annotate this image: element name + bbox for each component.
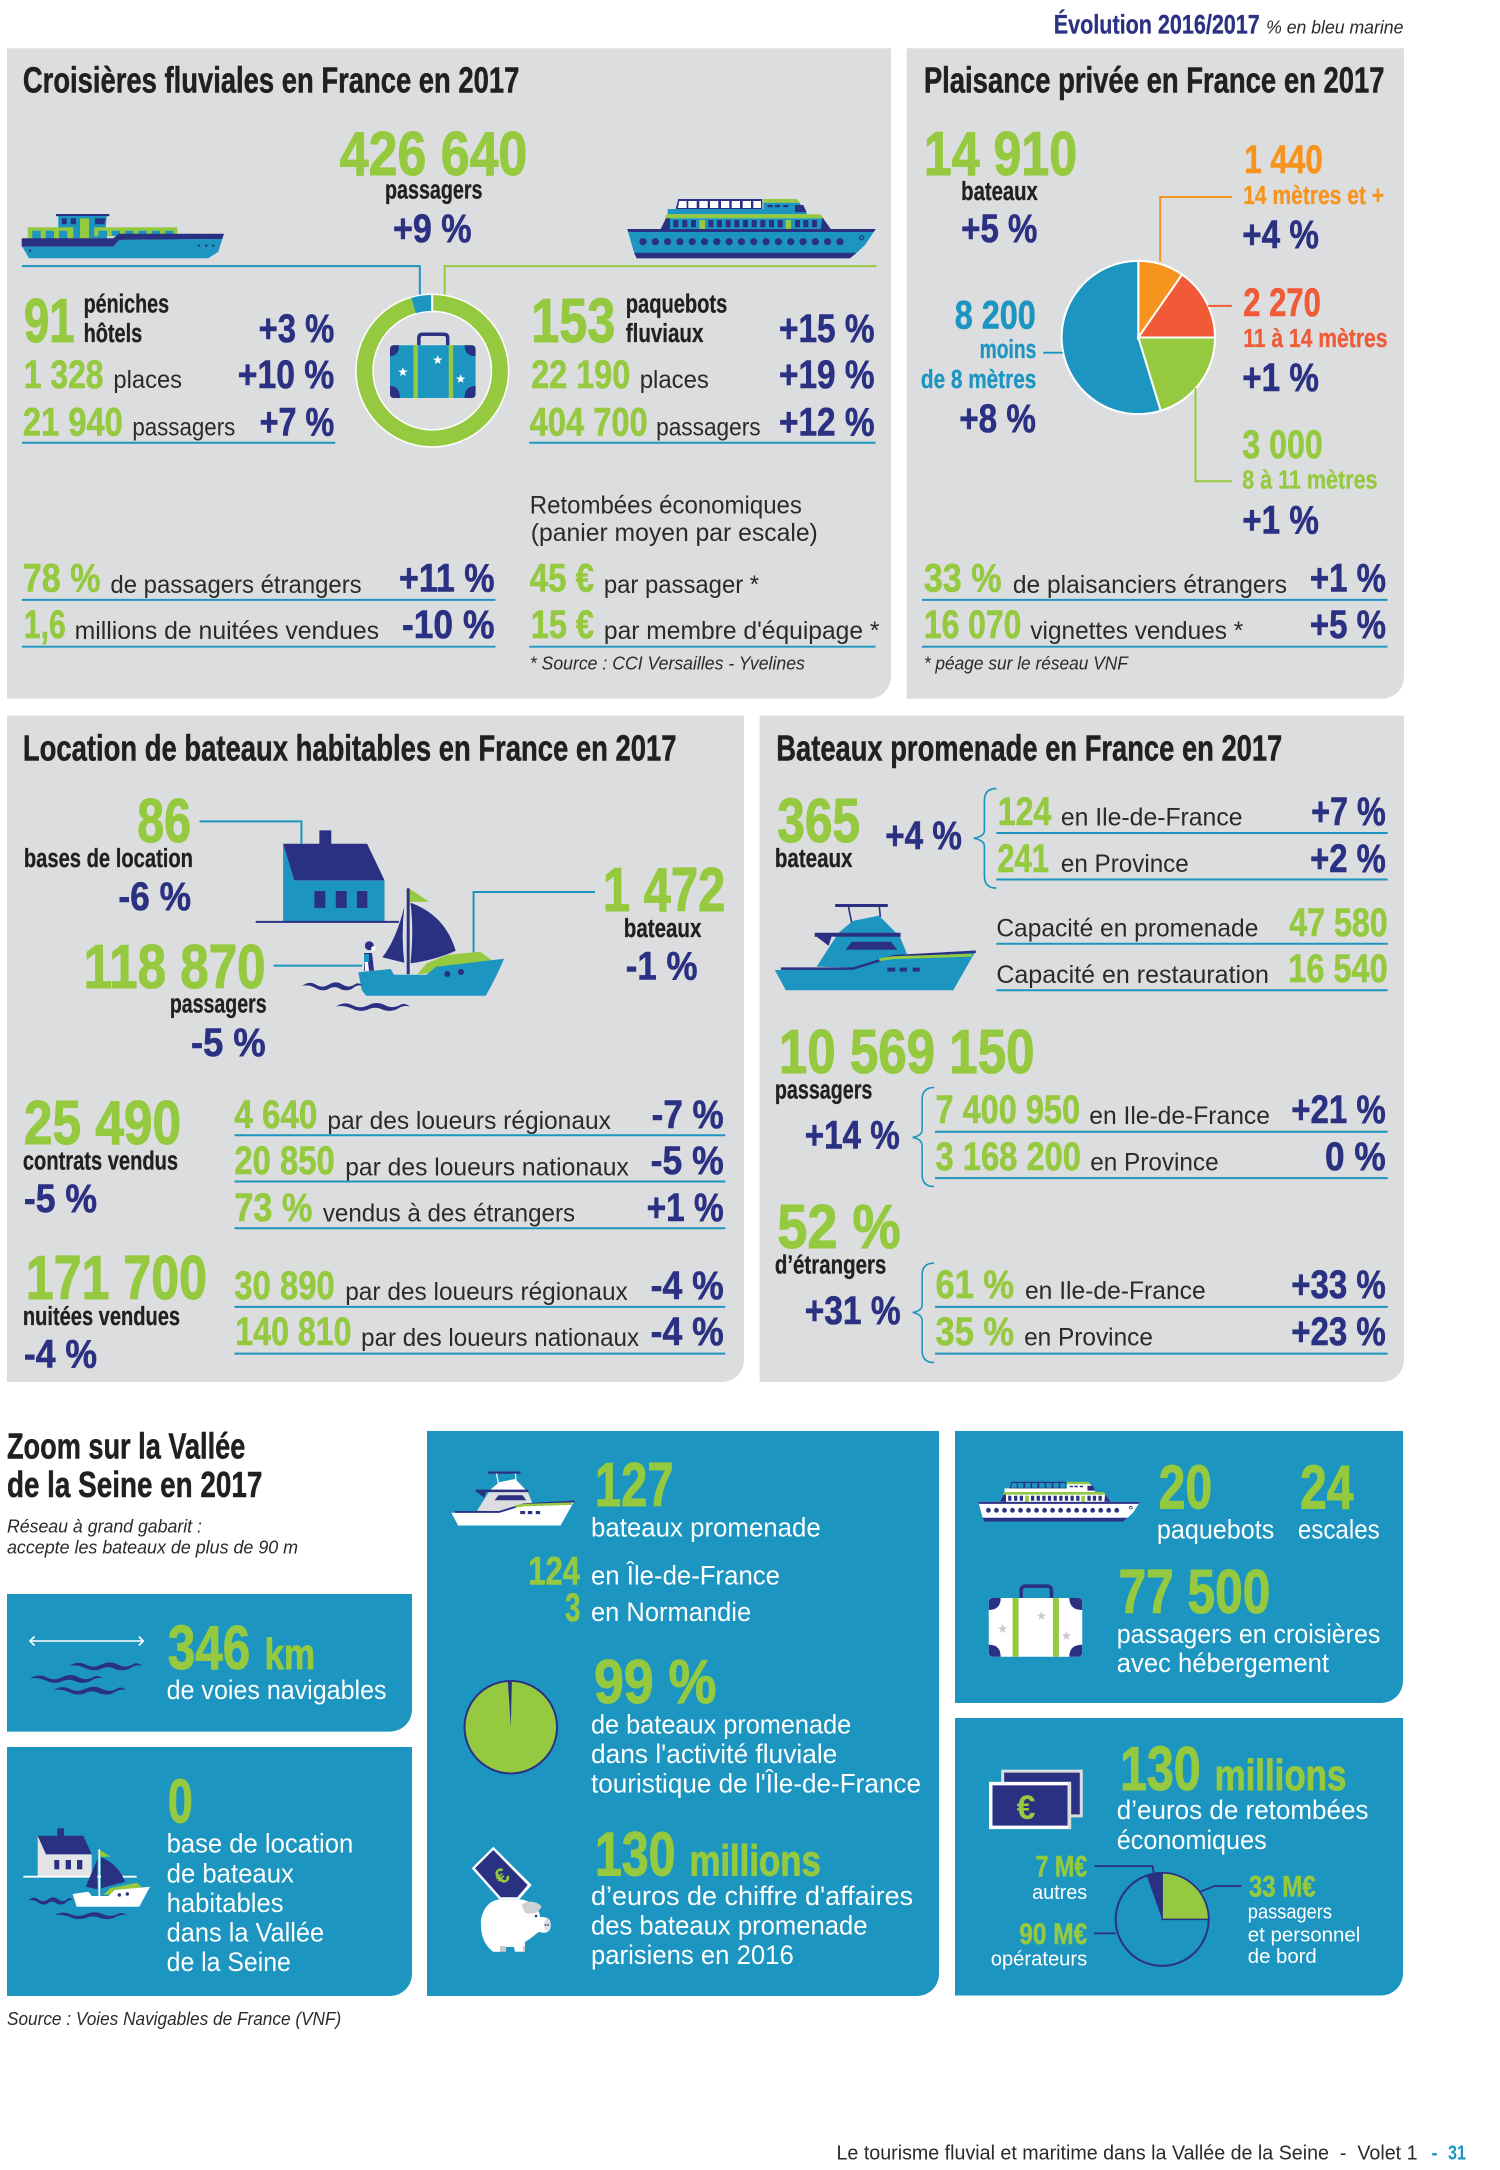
key figure: passagers: passagers xyxy=(775,1077,872,1105)
label: 14 mètres et plus: 14 mètres et + xyxy=(1243,182,1384,210)
footer: 31 xyxy=(1448,2142,1466,2164)
stats: paquebots fluviaux xyxy=(529,287,876,444)
key figure: passagers: 426 640 xyxy=(340,120,527,189)
key figure: bases de location: bases de location xyxy=(24,845,193,873)
stats: nuitées détail: 140 810 xyxy=(235,1310,352,1354)
stats: péniches hôtels xyxy=(22,287,335,444)
label: 14 mètres et plus xyxy=(1242,138,1384,257)
stats: capacités xyxy=(996,901,1388,991)
note: réseau à grand gabarit: Réseau à grand gabarit : xyxy=(7,1516,202,1537)
figure: 0 base de location: de la Seine xyxy=(167,1947,291,1977)
label: 8 à 11 mètres: 3 000 xyxy=(1242,423,1323,467)
label: 33 M€ passagers et personnel de bord: de bord xyxy=(1248,1946,1317,1968)
stats: péniches hôtels: 91 xyxy=(24,287,75,356)
stats: capacités: 47 580 xyxy=(1289,901,1388,945)
stats: étrangers par région: en Ile-de-France xyxy=(1025,1277,1206,1305)
stats: retombées économiques: Retombées économiques xyxy=(530,491,802,519)
stats: péniches hôtels: +3 % xyxy=(259,307,334,351)
label: 14 mètres et plus: +4 % xyxy=(1242,213,1319,257)
connector: bases to house xyxy=(199,821,301,844)
label: 14 mètres et plus: 1 440 xyxy=(1244,138,1323,182)
icon: paquebot xyxy=(627,199,876,258)
stats: étrangers par région: 61 % xyxy=(936,1263,1014,1307)
stats: étrangers par région: 35 % xyxy=(936,1310,1014,1354)
panel background xyxy=(7,48,891,699)
panel: croisières fluviales xyxy=(7,48,891,699)
stats: passagers par région: en Ile-de-France xyxy=(1089,1102,1270,1130)
figure: 20 paquebots xyxy=(1157,1453,1274,1544)
icon: euro banknotes: € xyxy=(1017,1789,1036,1827)
stats: péniches hôtels: places xyxy=(113,366,182,394)
stats: bateaux par région: +2 % xyxy=(1310,837,1386,881)
key figure: passagers: passagers xyxy=(170,990,267,1018)
stats: nuitées détail: par des loueurs régionaux xyxy=(345,1278,628,1306)
stats: plaisanciers et vignettes xyxy=(922,556,1388,675)
panel background xyxy=(7,1594,412,1732)
key figure: passagers xyxy=(84,933,267,1065)
chart: pie by boat length xyxy=(1061,260,1216,415)
stats: retombées économiques xyxy=(529,491,880,675)
label: 11 à 14 mètres: +1 % xyxy=(1242,356,1319,400)
figure: 99 %: touristique de l'Île-de-France xyxy=(591,1767,921,1798)
chart: donut with suitcase xyxy=(355,293,509,448)
key figure: 365 bateaux: bateaux xyxy=(775,845,853,873)
figure: 77 500 passagers: passagers en croisières xyxy=(1117,1619,1380,1649)
key figure: passagers: 118 870 xyxy=(84,933,266,1002)
footer: - xyxy=(1432,2142,1438,2164)
stats: nuitées détail: -4 % xyxy=(651,1310,724,1354)
figure: 0 base de location: habitables xyxy=(167,1888,284,1918)
stats: contrats vendus: 25 490 xyxy=(24,1089,181,1158)
key figure: passagers xyxy=(340,120,527,251)
label: 8 à 11 mètres: 8 à 11 mètres xyxy=(1242,466,1378,494)
icon: euro banknotes xyxy=(991,1771,1081,1829)
key figure: bateaux: bateaux xyxy=(961,178,1038,206)
brace: étrangers xyxy=(913,1263,934,1363)
panel: base de location xyxy=(7,1747,412,1996)
figure: 130 millions: économiques xyxy=(1117,1825,1267,1855)
stats: paquebots fluviaux: +15 % xyxy=(779,307,875,351)
icon: waves xyxy=(30,1662,143,1695)
panel: location de bateaux habitables xyxy=(7,716,744,1382)
stats: retombées économiques: 45 € xyxy=(530,556,594,600)
connector: blue slice xyxy=(1043,352,1063,354)
stats: paquebots fluviaux: passagers xyxy=(656,413,761,441)
stats: contrats détail: 4 640 xyxy=(234,1093,317,1137)
heading: location de bateaux: Location de bateaux habitables en France en 2017 xyxy=(23,728,677,768)
panel background xyxy=(955,1718,1403,1996)
label: 11 à 14 mètres xyxy=(1242,281,1388,400)
figure: 127 bateaux promenade: 124 xyxy=(528,1550,580,1594)
figure: 24 escales: 24 xyxy=(1300,1453,1353,1522)
stats: péniches hôtels: péniches xyxy=(84,290,169,318)
label: 8 à 11 mètres: +1 % xyxy=(1242,498,1319,542)
figure: 77 500 passagers: avec hébergement xyxy=(1117,1648,1330,1678)
key figure: bateaux: +5 % xyxy=(961,207,1037,251)
icon: suitcase xyxy=(390,334,476,398)
stats: étrangers par région: +23 % xyxy=(1291,1310,1386,1354)
stats: plaisanciers et vignettes: de plaisanciers étrangers xyxy=(1013,571,1287,599)
stats: contrats détail: -5 % xyxy=(651,1139,724,1183)
stats: étrangers et nuitées: millions de nuitées vendues xyxy=(75,617,379,645)
icon: sailboat with passenger xyxy=(302,888,504,1011)
connector: orange slice xyxy=(1160,197,1232,262)
stats: contrats vendus: contrats vendus xyxy=(23,1148,178,1176)
figure: 346 km: de voies navigables xyxy=(167,1675,387,1705)
stats: passagers par région: 3 168 200 xyxy=(936,1135,1081,1179)
key figure: bateaux: 14 910 xyxy=(924,120,1077,189)
stats: capacités: Capacité en promenade xyxy=(996,915,1258,943)
stats: péniches hôtels: +10 % xyxy=(238,353,334,397)
heading: croisières fluviales: Croisières fluviales en France en 2017 xyxy=(23,61,519,101)
stats: plaisanciers et vignettes: vignettes vendues * xyxy=(1030,617,1244,645)
heading: zoom sur la Vallée de la Seine: de la Seine en 2017 xyxy=(7,1465,262,1505)
stats: paquebots fluviaux: +12 % xyxy=(779,400,875,444)
figure: 20 paquebots: 20 xyxy=(1159,1453,1212,1522)
stats: nuitées vendues: 171 700 xyxy=(26,1244,207,1313)
label: 8 à 11 mètres xyxy=(1242,423,1378,542)
stats: contrats détail: 73 % xyxy=(234,1186,312,1230)
stats: contrats vendus xyxy=(23,1089,181,1221)
stats: paquebots fluviaux: paquebots xyxy=(626,290,727,318)
stats: contrats détail: par des loueurs nationaux xyxy=(345,1154,629,1182)
icon: white promenade boat xyxy=(451,1473,574,1525)
stats: contrats vendus: -5 % xyxy=(24,1177,97,1221)
stats: plaisanciers et vignettes: +1 % xyxy=(1310,556,1386,600)
key figure: étrangers: 52 % xyxy=(777,1193,901,1262)
stats: bateaux par région: 241 xyxy=(997,837,1049,881)
stats: péniches hôtels: 21 940 xyxy=(23,400,123,444)
stats: contrats détail: par des loueurs régionaux xyxy=(327,1107,611,1135)
key figure: bateaux: -1 % xyxy=(626,945,697,989)
brace: passagers xyxy=(913,1088,934,1187)
key figure: bases de location: 86 xyxy=(137,787,191,856)
figure: 24 escales: escales xyxy=(1298,1514,1380,1544)
stats: péniches hôtels: passagers xyxy=(132,413,235,441)
icon: white paquebot xyxy=(978,1482,1140,1521)
key figure: passagers xyxy=(775,1018,1035,1158)
figure: 130 millions: d’euros de chiffre d'affaires xyxy=(591,1881,913,1911)
panel: bateaux promenade xyxy=(760,716,1404,1382)
icon: white suitcase xyxy=(989,1586,1082,1657)
label: 90 M€ opérateurs xyxy=(991,1918,1088,1971)
connector: péniches to donut xyxy=(22,266,420,294)
label: 33 M€ passagers et personnel de bord xyxy=(1248,1871,1360,1968)
label: 33 M€ passagers et personnel de bord: 33 M€ xyxy=(1249,1871,1316,1904)
figure: 0 base de location: de bateaux xyxy=(167,1858,294,1888)
figure: 127 bateaux promenade: en Île-de-France xyxy=(591,1560,780,1591)
stats: retombées économiques: 15 € xyxy=(531,603,594,647)
panel: retombées économiques xyxy=(955,1718,1403,1996)
stats: retombées économiques: * Source : CCI Versailles - Yvelines xyxy=(530,654,805,675)
label: moins de 8 mètres: 8 200 xyxy=(955,293,1036,337)
label: moins de 8 mètres: de 8 mètres xyxy=(921,366,1036,394)
stats: étrangers par région: en Province xyxy=(1024,1324,1153,1352)
label: 7 M€ autres: 7 M€ xyxy=(1036,1851,1088,1884)
heading: zoom sur la Vallée de la Seine xyxy=(7,1427,262,1505)
figure: 346 km: 346 xyxy=(168,1614,250,1683)
key figure: bateaux: bateaux xyxy=(624,915,702,943)
connector: paquebots to donut xyxy=(445,266,877,294)
panel background xyxy=(760,716,1404,1382)
label: 7 M€ autres: autres xyxy=(1032,1882,1087,1904)
connector: 90 M€ xyxy=(1094,1932,1116,1934)
label: 33 M€ passagers et personnel de bord: et personnel xyxy=(1248,1924,1360,1946)
footer: Le tourisme fluvial et maritime dans la Vallée de la Seine - Volet 1 xyxy=(836,2142,1418,2164)
panel background xyxy=(955,1431,1403,1703)
key figure: 365 bateaux xyxy=(775,787,962,873)
figure: 99 % xyxy=(591,1648,921,1798)
figure: 127 bateaux promenade: en Normandie xyxy=(591,1597,751,1627)
panel background xyxy=(906,48,1404,699)
stats: nuitées vendues: -4 % xyxy=(24,1333,97,1377)
icon: piggy bank with banknote xyxy=(472,1847,551,1952)
key figure: bateaux xyxy=(924,120,1077,251)
stats: péniches hôtels: hôtels xyxy=(84,320,142,348)
figure: 346 km: km xyxy=(265,1630,315,1679)
panel: bateaux promenade Vallée de la Seine xyxy=(427,1431,939,1996)
figure: 99 %: 99 % xyxy=(594,1648,716,1717)
stats: paquebots fluviaux: 153 xyxy=(531,287,615,356)
stats: paquebots fluviaux: 404 700 xyxy=(530,400,648,444)
label: moins de 8 mètres: moins xyxy=(980,336,1036,364)
key figure: passagers: 10 569 150 xyxy=(779,1018,1035,1087)
stats: contrats détail: -7 % xyxy=(652,1093,724,1137)
stats: étrangers par région: +33 % xyxy=(1291,1263,1386,1307)
figure: 127 bateaux promenade: bateaux promenade xyxy=(591,1512,821,1542)
figure: 99 %: de bateaux promenade xyxy=(591,1709,851,1739)
icon: house and boat xyxy=(23,1828,150,1919)
stats: étrangers par région xyxy=(935,1263,1388,1354)
figure: 77 500 passagers xyxy=(1117,1558,1380,1678)
stats: passagers par région xyxy=(935,1088,1388,1179)
figure: 0 base de location: dans la Vallée xyxy=(167,1917,324,1947)
panel background xyxy=(7,716,744,1382)
key figure: étrangers: d’étrangers xyxy=(775,1252,886,1280)
connector: passagers to person xyxy=(274,965,362,967)
icon: péniche xyxy=(22,214,224,258)
stats: étrangers et nuitées: 78 % xyxy=(23,556,100,600)
label: moins de 8 mètres xyxy=(921,293,1036,441)
stats: passagers par région: 0 % xyxy=(1325,1135,1386,1179)
stats: capacités: 16 540 xyxy=(1288,947,1388,991)
stats: passagers par région: 7 400 950 xyxy=(936,1088,1080,1132)
stats: retombées économiques: par membre d'équipage * xyxy=(604,617,880,645)
key figure: 365 bateaux: +4 % xyxy=(885,814,962,858)
stats: passagers par région: en Province xyxy=(1090,1149,1219,1177)
figure: 130 millions: 130 xyxy=(595,1820,676,1889)
stats: plaisanciers et vignettes: * péage sur le réseau VNF xyxy=(924,654,1129,675)
connector: 7 M€ xyxy=(1094,1866,1154,1874)
source: Source : Voies Navigables de France (VNF) xyxy=(7,2009,341,2030)
panel background xyxy=(427,1431,939,1996)
panel: paquebots Vallée de la Seine xyxy=(955,1431,1403,1703)
figure: 99 %: dans l'activité fluviale xyxy=(591,1739,837,1769)
icon: width arrow xyxy=(30,1636,143,1646)
stats: bateaux par région: en Ile-de-France xyxy=(1061,803,1242,831)
stats: étrangers et nuitées xyxy=(22,556,495,647)
key figure: 365 bateaux: 365 xyxy=(777,787,860,856)
key figure: bateaux: 1 472 xyxy=(603,856,725,925)
stats: contrats détail xyxy=(234,1093,725,1230)
icon: house xyxy=(256,830,399,922)
key figure: passagers: +14 % xyxy=(805,1114,900,1158)
heading: bateaux promenade: Bateaux promenade en France en 2017 xyxy=(776,728,1282,768)
figure: 130 millions: d’euros de retombées xyxy=(1117,1795,1368,1825)
panel background xyxy=(7,1747,412,1996)
figure: 130 millions: 130 xyxy=(1120,1735,1201,1804)
stats: retombées économiques: (panier moyen par escale) xyxy=(531,519,818,547)
stats: étrangers et nuitées: de passagers étrangers xyxy=(110,571,362,599)
stats: bateaux par région: 124 xyxy=(998,790,1051,834)
figure: 130 millions: parisiens en 2016 xyxy=(591,1940,794,1970)
stats: nuitées détail xyxy=(234,1264,725,1354)
key figure: étrangers: +31 % xyxy=(805,1289,901,1333)
figure: 127 bateaux promenade: 127 xyxy=(595,1451,674,1520)
stats: plaisanciers et vignettes: +5 % xyxy=(1310,603,1386,647)
stats: contrats détail: vendus à des étrangers xyxy=(323,1199,575,1227)
stats: plaisanciers et vignettes: 33 % xyxy=(924,556,1001,600)
key figure: étrangers xyxy=(775,1193,901,1333)
icon: piggy bank with banknote: € xyxy=(489,1862,514,1890)
label: 11 à 14 mètres: 11 à 14 mètres xyxy=(1243,325,1388,353)
heading: zoom sur la Vallée de la Seine: Zoom sur la Vallée xyxy=(7,1427,245,1467)
figure: 130 millions xyxy=(1117,1735,1368,1855)
legend: évolution 2016/2017: % en bleu marine xyxy=(1266,17,1403,38)
chart: retombées pie xyxy=(1116,1873,1209,1966)
connector: red slice xyxy=(1208,305,1232,307)
key figure: passagers: passagers xyxy=(385,177,483,205)
stats: paquebots fluviaux: +19 % xyxy=(779,353,875,397)
figure: 346 km xyxy=(167,1614,387,1705)
stats: bateaux par région xyxy=(996,790,1388,881)
legend: évolution 2016/2017: Évolution 2016/2017 xyxy=(1054,8,1260,39)
stats: plaisanciers et vignettes: 16 070 xyxy=(924,603,1021,647)
figure: 130 millions: millions xyxy=(689,1836,821,1885)
figure: 0 base de location: base de location xyxy=(167,1829,353,1859)
stats: péniches hôtels: 1 328 xyxy=(24,353,103,397)
figure: 130 millions: millions xyxy=(1215,1751,1346,1800)
figure: 20 paquebots: paquebots xyxy=(1157,1514,1274,1544)
figure: 0 base de location xyxy=(167,1767,353,1977)
stats: bateaux par région: +7 % xyxy=(1311,790,1386,834)
label: 11 à 14 mètres: 2 270 xyxy=(1243,281,1321,325)
label: 90 M€ opérateurs: 90 M€ xyxy=(1019,1918,1088,1951)
stats: paquebots fluviaux: fluviaux xyxy=(626,320,704,348)
stats: nuitées détail: -4 % xyxy=(651,1264,724,1308)
note: réseau à grand gabarit: accepte les bateaux de plus de 90 m xyxy=(7,1538,298,1559)
figure: 127 bateaux promenade: 3 xyxy=(565,1586,580,1630)
stats: paquebots fluviaux: places xyxy=(640,366,709,394)
key figure: bases de location xyxy=(24,787,193,919)
key figure: passagers: -5 % xyxy=(191,1021,266,1065)
stats: nuitées vendues xyxy=(23,1244,207,1377)
figure: 130 millions: des bateaux promenade xyxy=(591,1910,868,1940)
stats: étrangers et nuitées: -10 % xyxy=(402,603,494,647)
figure: 0 base de location: 0 xyxy=(168,1767,193,1836)
note: réseau à grand gabarit xyxy=(7,1516,298,1559)
stats: nuitées vendues: nuitées vendues xyxy=(23,1303,180,1331)
panel: plaisance privée xyxy=(906,48,1404,699)
stats: bateaux par région: en Province xyxy=(1061,850,1189,878)
key figure: bases de location: -6 % xyxy=(118,875,191,919)
stats: étrangers et nuitées: +11 % xyxy=(399,556,494,600)
brace: bateaux xyxy=(974,789,996,888)
stats: contrats détail: +1 % xyxy=(647,1186,724,1230)
figure: 127 bateaux promenade xyxy=(528,1451,821,1630)
stats: nuitées détail: 30 890 xyxy=(234,1264,335,1308)
icon: bateau promenade xyxy=(775,905,976,990)
key figure: bateaux xyxy=(603,856,725,989)
connector: bateaux to boat xyxy=(474,892,595,952)
stats: capacités: Capacité en restauration xyxy=(996,961,1269,989)
stats: péniches hôtels: +7 % xyxy=(260,400,334,444)
stats: paquebots fluviaux: 22 190 xyxy=(531,353,630,397)
key figure: passagers: +9 % xyxy=(393,207,472,251)
stats: étrangers et nuitées: 1,6 xyxy=(24,603,66,647)
label: 90 M€ opérateurs: opérateurs xyxy=(991,1949,1087,1971)
stats: passagers par région: +21 % xyxy=(1291,1088,1386,1132)
stats: retombées économiques: par passager * xyxy=(604,571,759,599)
label: 7 M€ autres xyxy=(1032,1851,1088,1904)
stats: nuitées détail: par des loueurs nationaux xyxy=(361,1324,640,1352)
label: 33 M€ passagers et personnel de bord: passagers xyxy=(1248,1901,1332,1923)
figure: 24 escales xyxy=(1298,1453,1380,1544)
connector: 33 M€ xyxy=(1201,1886,1241,1892)
label: moins de 8 mètres: +8 % xyxy=(959,397,1036,441)
figure: 77 500 passagers: 77 500 xyxy=(1119,1558,1270,1627)
stats: contrats détail: 20 850 xyxy=(234,1139,335,1183)
panel: voies navigables xyxy=(7,1594,412,1732)
connector: green slice xyxy=(1195,388,1232,481)
chart: 99 % pie xyxy=(465,1681,557,1773)
figure: 130 millions xyxy=(591,1820,913,1970)
